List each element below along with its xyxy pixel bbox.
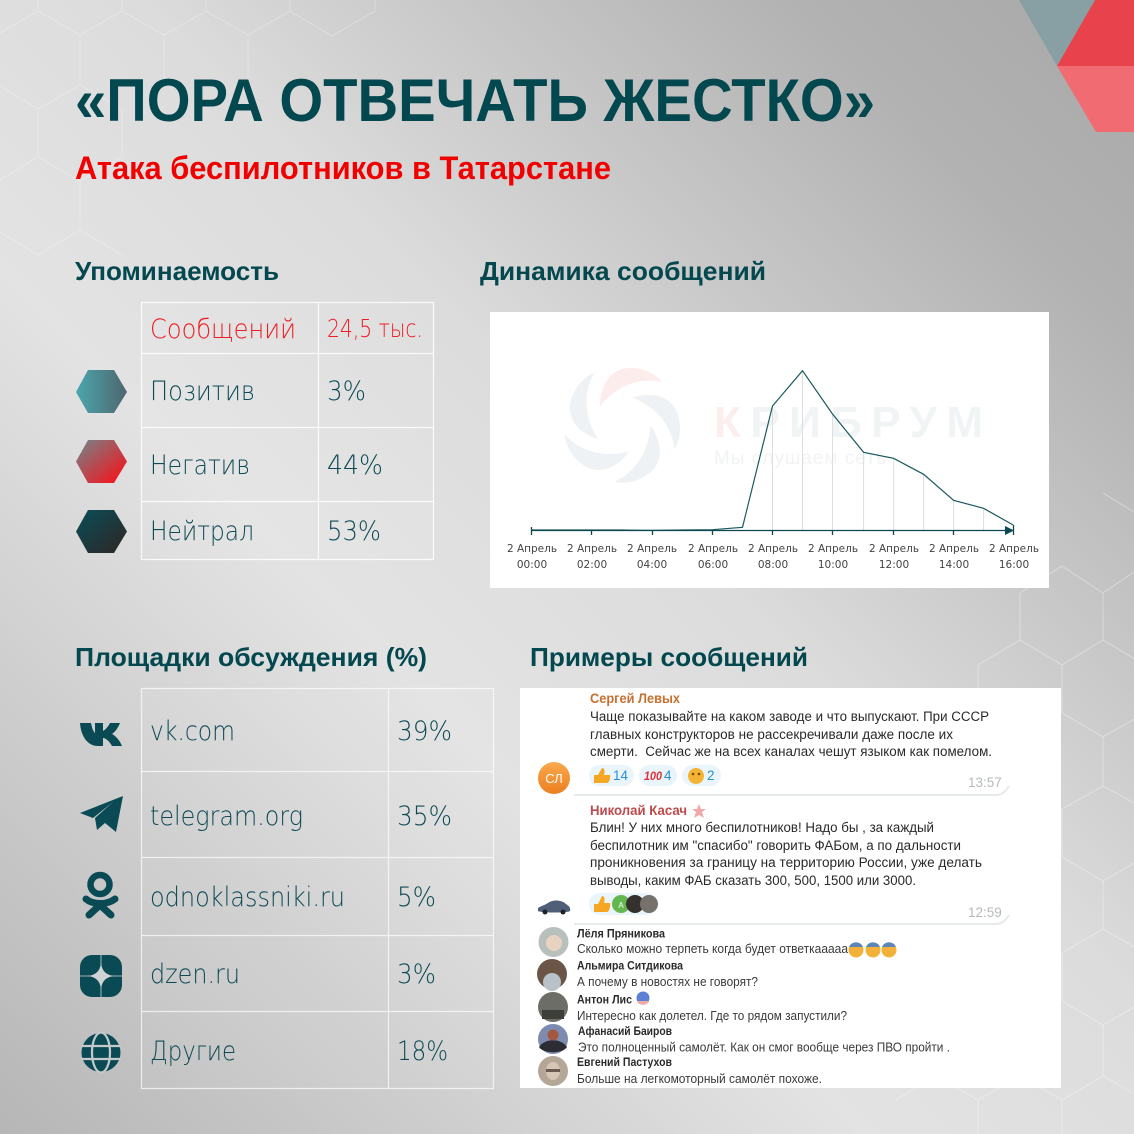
x axis labels: 12:00 xyxy=(879,559,909,571)
comment: Nikolay xyxy=(538,803,1009,924)
row: negative xyxy=(76,440,383,483)
comment: Lyolya: Лёля Пряникова xyxy=(577,928,666,940)
data line xyxy=(531,371,1013,530)
row: messages xyxy=(150,314,423,345)
row: other: 18% xyxy=(397,1036,448,1067)
row: neutral: Нейтрал xyxy=(150,516,254,547)
x axis labels: 04:00 xyxy=(637,559,667,571)
heading: message dynamics: Динамика сообщений xyxy=(480,256,766,286)
x axis xyxy=(531,525,1014,535)
row: odnoklassniki: 5% xyxy=(397,882,436,913)
comment: Sergey xyxy=(538,691,1009,795)
x axis labels: 2 Апрель xyxy=(627,543,677,555)
comment: Nikolay: беспилотник им "спасибо" говорить ФАБом, а по дальности xyxy=(590,838,961,853)
x axis labels: 08:00 xyxy=(758,559,788,571)
row: vk: 39% xyxy=(397,716,452,747)
comment: Nikolay: Николай Касач xyxy=(590,803,687,818)
watermark: КРИБРУМ xyxy=(714,398,983,447)
comment: Nikolay: выводы, каким ФАБ сказать 300, 500, 1500 или 3000. xyxy=(590,873,916,888)
row: dzen: dzen.ru xyxy=(150,959,240,990)
comment: Sergey: 2 xyxy=(707,768,715,783)
comment: Anton: Интересно как долетел. Где то рядом запустили? xyxy=(577,1009,847,1023)
comment: Sergey: 13:57 xyxy=(968,775,1002,790)
x axis labels: 2 Апрель xyxy=(748,543,798,555)
x axis labels: 2 Апрель xyxy=(869,543,919,555)
x axis labels xyxy=(507,543,1039,571)
comment: Nikolay: проникновения за границу на территорию России, уже делать xyxy=(590,855,982,870)
x axis labels: 00:00 xyxy=(517,559,547,571)
chart drop lines xyxy=(772,371,984,530)
x axis labels: 2 Апрель xyxy=(929,543,979,555)
row: other xyxy=(81,1032,448,1072)
comment: Lyolya: Сколько можно терпеть когда будет ответкаааaa xyxy=(577,942,848,956)
x axis labels: 14:00 xyxy=(939,559,969,571)
comment: Anton xyxy=(538,992,847,1023)
comment: Evgeny: Евгений Пастухов xyxy=(577,1057,672,1069)
row: odnoklassniki xyxy=(86,875,436,915)
comment: Sergey: 14 xyxy=(613,768,629,783)
comment: Sergey: 4 xyxy=(664,768,672,783)
row: telegram: telegram.org xyxy=(150,801,303,832)
row: telegram: 35% xyxy=(397,801,452,832)
x axis labels: 10:00 xyxy=(818,559,848,571)
row: positive: Позитив xyxy=(150,376,255,407)
row: neutral: 53% xyxy=(327,516,381,547)
comment: Almira: Альмира Ситдикова xyxy=(577,960,684,972)
panel: platforms table xyxy=(80,688,494,1088)
row: neutral xyxy=(76,510,381,553)
comment: Nikolay: Блин! У них много беспилотников! Надо бы , за каждый xyxy=(590,820,934,835)
subtitle: Атака беспилотников в Татарстане xyxy=(75,150,611,186)
row: telegram xyxy=(80,796,452,832)
row: vk xyxy=(80,716,452,747)
heading: platforms: Площадки обсуждения (%) xyxy=(75,642,427,672)
row: negative: Негатив xyxy=(150,450,250,481)
comment: Anton: Антон Лис xyxy=(577,994,633,1006)
x axis labels: 2 Апрель xyxy=(989,543,1039,555)
row: positive: 3% xyxy=(327,376,366,407)
row: positive xyxy=(76,370,366,413)
heading: mentions: Упоминаемость xyxy=(75,256,279,286)
comment: Afanasy: Это полноценный самолёт. Как он смог вообще через ПВО пройти . xyxy=(578,1041,950,1055)
x axis labels: 2 Апрель xyxy=(567,543,617,555)
row: messages: Сообщений xyxy=(150,314,296,345)
comment: Almira: А почему в новостях не говорят? xyxy=(577,975,758,989)
comment: Evgeny: Больше на легкомоторный самолёт похоже. xyxy=(577,1072,822,1086)
row: vk: vk.com xyxy=(150,716,235,747)
x axis labels: 02:00 xyxy=(577,559,607,571)
comment: Sergey: СЛ xyxy=(545,771,563,786)
row: negative: 44% xyxy=(327,450,383,481)
comment: Sergey: главных конструкторов не рассекречивали даже после их xyxy=(590,727,953,742)
x axis labels: 16:00 xyxy=(999,559,1029,571)
corner decoration xyxy=(1019,0,1134,132)
row: dzen xyxy=(80,955,436,997)
comment: Sergey: смерти. Сейчас же на всех каналах чешут языком как помелом. xyxy=(590,744,992,759)
row: dzen: 3% xyxy=(397,959,436,990)
watermark xyxy=(557,368,983,493)
x axis labels: 2 Апрель xyxy=(507,543,557,555)
x axis labels: 2 Апрель xyxy=(808,543,858,555)
comment: Sergey: Чаще показывайте на каком заводе и что выпускают. При СССР xyxy=(590,709,989,724)
heading: message examples: Примеры сообщений xyxy=(530,642,808,672)
comment: Lyolya xyxy=(538,927,896,958)
comment: Sergey: 100 xyxy=(644,769,662,783)
comment: Nikolay: А xyxy=(618,901,624,910)
panel: message examples xyxy=(520,688,1061,1088)
x axis labels: 2 Апрель xyxy=(688,543,738,555)
comment: Sergey: Сергей Левых xyxy=(590,691,680,706)
row: messages: 24,5 тыс. xyxy=(327,314,423,343)
row: other: Другие xyxy=(150,1036,236,1067)
comment: Almira xyxy=(537,959,758,991)
panel: mentions table xyxy=(76,302,434,560)
x axis labels: 06:00 xyxy=(698,559,728,571)
row: odnoklassniki: odnoklassniki.ru xyxy=(150,882,345,913)
comment: Afanasy: Афанасий Баиров xyxy=(578,1026,672,1038)
comment: Evgeny xyxy=(538,1056,822,1086)
title: «ПОРА ОТВЕЧАТЬ ЖЕСТКО» xyxy=(75,67,875,134)
panel: line chart xyxy=(490,312,1049,588)
comment: Nikolay: 12:59 xyxy=(968,905,1002,920)
watermark: Мы слушаем сеть xyxy=(714,448,886,469)
comment: Afanasy xyxy=(538,1024,950,1055)
